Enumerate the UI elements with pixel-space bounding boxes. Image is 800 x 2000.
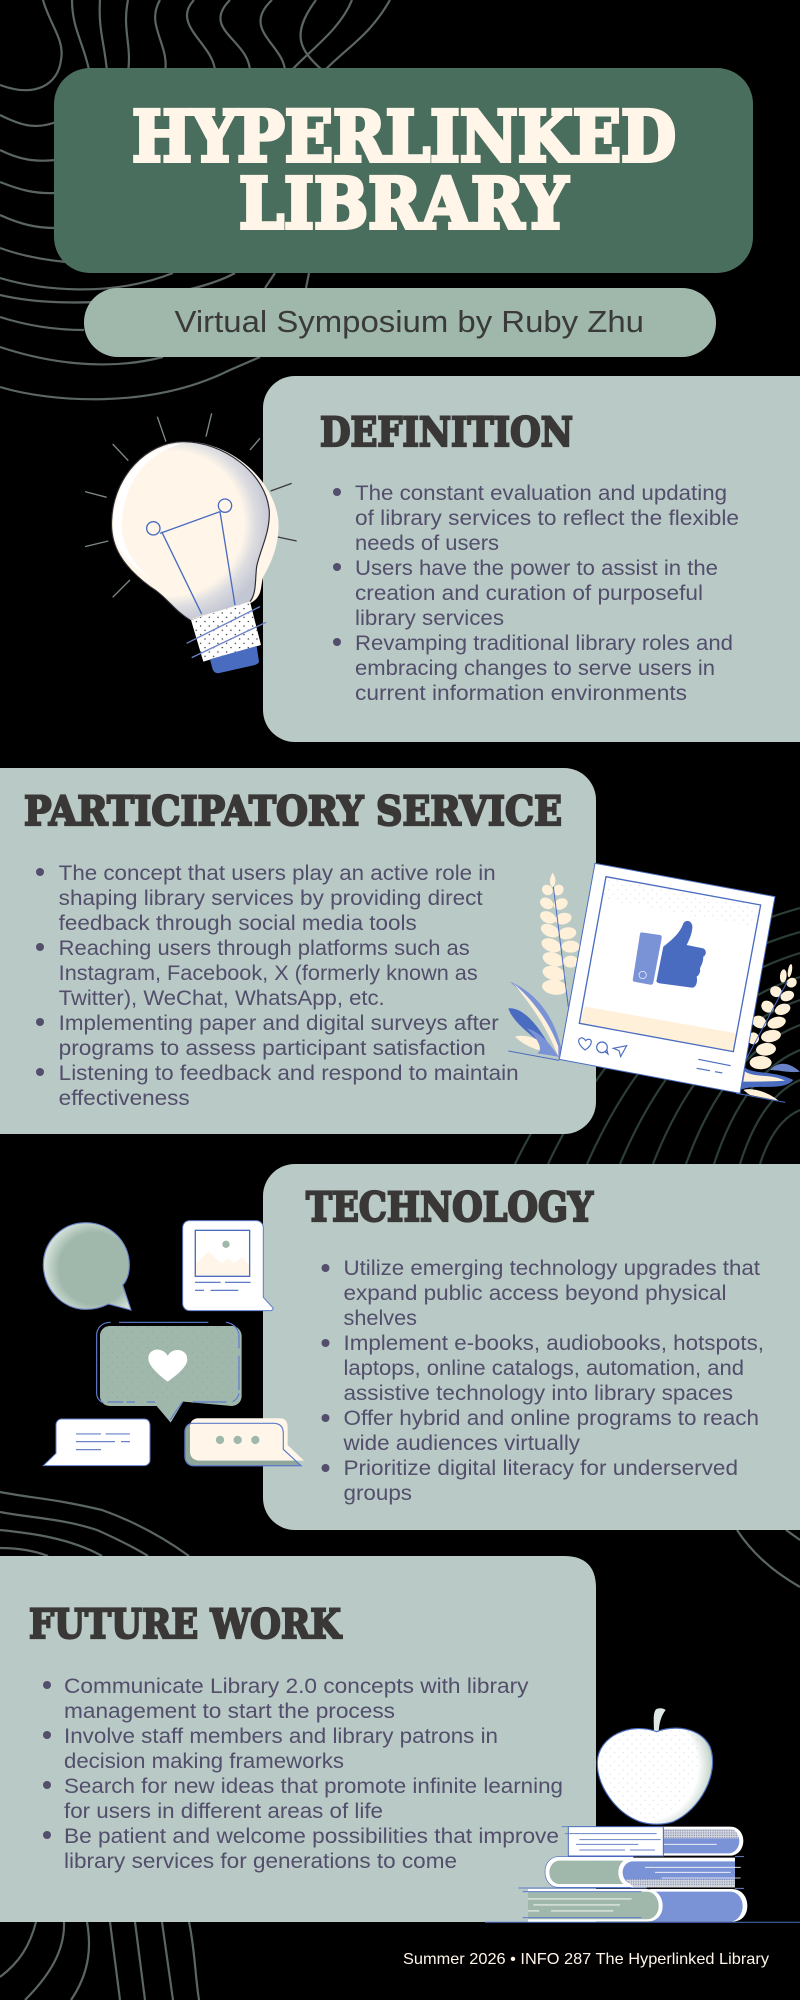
bullet list: future work: for users in different areas of life: [64, 1800, 383, 1823]
icon: white speech bubble with lines: [43, 1419, 150, 1466]
icon: chat bubbles: [43, 1221, 304, 1466]
bullet list: definition: embracing changes to serve users in: [355, 657, 715, 680]
icon: middle book: [545, 1857, 744, 1888]
bullet list: participatory service: Listening to feedback and respond to maintain: [59, 1062, 519, 1085]
bullet list: participatory service: Instagram, Facebook, X (formerly known as: [59, 962, 478, 985]
icon: bottom book: [518, 1888, 747, 1922]
bullet list: future work: library services for generations to come: [64, 1850, 457, 1873]
bullet list: technology: shelves: [344, 1307, 417, 1330]
bullet list: technology: Prioritize digital literacy for underserved: [344, 1457, 738, 1480]
bullet list: definition: Revamping traditional library roles and: [355, 632, 733, 655]
footer text: Summer 2026 • INFO 287 The Hyperlinked Library: [403, 1951, 769, 1968]
bullet list: participatory service: Twitter), WeChat, WhatsApp, etc.: [59, 987, 385, 1010]
bullet list: future work: decision making frameworks: [64, 1750, 344, 1773]
bullet list: technology: wide audiences virtually: [342, 1432, 581, 1455]
heading: definition: DEFINITION: [320, 409, 573, 456]
bullet list: technology: groups: [344, 1482, 412, 1505]
icon: social media post with thumbs up and plants: [508, 863, 800, 1103]
heading: future work: FUTURE WORK: [29, 1601, 342, 1648]
bullet list: future work: Search for new ideas that promote infinite learning: [64, 1775, 563, 1798]
bullet list: participatory service: Implementing paper and digital surveys after: [59, 1012, 499, 1035]
bullet list: future work: [43, 1675, 563, 1873]
panel: future work: [0, 1556, 596, 1922]
bullet list: future work: management to start the process: [64, 1700, 395, 1723]
bullet list: participatory service: Reaching users through platforms such as: [59, 937, 470, 960]
heading: technology: TECHNOLOGY: [306, 1184, 593, 1231]
icon: top book: [562, 1827, 743, 1856]
bullet list: participatory service: programs to assess participant satisfaction: [59, 1037, 486, 1060]
title text: LIBRARY: [239, 162, 569, 245]
bullet list: technology: Implement e-books, audiobooks, hotspots,: [344, 1332, 764, 1355]
subtitle pill: Virtual Symposium by Ruby Zhu: [174, 304, 644, 339]
bullet list: participatory service: effectiveness: [59, 1087, 190, 1110]
subtitle pill: [84, 288, 716, 357]
bullet list: definition: Users have the power to assist in the: [355, 557, 718, 580]
bullet list: definition: of library services to reflect the flexible: [355, 507, 739, 530]
bullet list: participatory service: shaping library services by providing direct: [59, 887, 483, 910]
icon: cream speech bubble with dots: [185, 1418, 304, 1466]
bullet list: participatory service: The concept that users play an active role in: [59, 862, 496, 885]
bullet list: future work: Be patient and welcome possibilities that improve: [64, 1825, 559, 1848]
bullet list: technology: assistive technology into library spaces: [344, 1382, 733, 1405]
bullet list: definition: [333, 482, 739, 705]
bullet list: definition: needs of users: [355, 532, 499, 555]
bullet list: technology: expand public access beyond physical: [344, 1282, 726, 1305]
bullet list: technology: Utilize emerging technology upgrades that: [344, 1257, 760, 1280]
title banner: [54, 68, 753, 273]
title text: HYPERLINKED: [132, 95, 676, 178]
bullet list: definition: The constant evaluation and updating: [355, 482, 727, 505]
panel: definition: [263, 376, 800, 742]
bullet list: definition: current information environments: [355, 682, 687, 705]
bullet list: future work: Involve staff members and library patrons in: [64, 1725, 498, 1748]
panel: technology: [263, 1164, 800, 1530]
icon: round speech bubble: [43, 1223, 131, 1310]
icon: apple: [597, 1708, 713, 1824]
bullet list: definition: library services: [355, 607, 504, 630]
bullet list: technology: laptops, online catalogs, automation, and: [344, 1357, 744, 1380]
icon: apple on stack of books: [485, 1708, 800, 1922]
bullet list: technology: [322, 1257, 764, 1505]
icon: heart speech bubble: [97, 1322, 242, 1423]
icon: light bulb: [85, 413, 297, 673]
bullet list: technology: Offer hybrid and online programs to reach: [344, 1407, 759, 1430]
bullet list: participatory service: feedback through social media tools: [59, 912, 417, 935]
panel: participatory service: [0, 768, 596, 1134]
heading: participatory service: PARTICIPATORY SERVICE: [24, 788, 562, 835]
bullet list: future work: Communicate Library 2.0 concepts with library: [64, 1675, 529, 1698]
bullet list: participatory service: [36, 862, 519, 1110]
title text: [132, 95, 676, 245]
bullet list: definition: creation and curation of purposeful: [355, 582, 703, 605]
icon: picture speech bubble: [183, 1221, 273, 1311]
